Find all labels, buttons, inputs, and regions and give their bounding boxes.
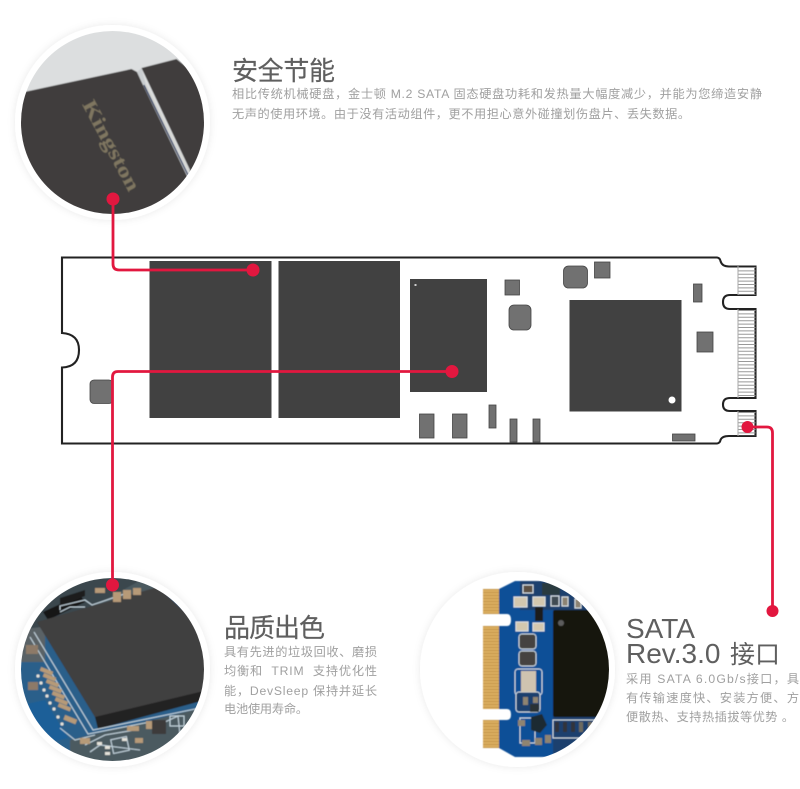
heading: SATA interface <box>626 613 780 669</box>
heading: energy saving: 安全节能 <box>232 56 335 86</box>
traces <box>30 592 200 754</box>
red callout line: SATA interface <box>742 421 778 617</box>
flash memory chip 2 <box>278 261 400 418</box>
red callout line: quality <box>106 365 458 592</box>
text block: energy saving description: 相比传统机械硬盘，金士顿 M.2 SATA 固态硬盘功耗和发热量大幅度减少，并能为您缔造安静 <box>232 86 762 101</box>
connector contacts <box>738 267 756 436</box>
text block: SATA interface description: 有传输速度快、安装方便、方 <box>626 690 799 705</box>
board outline <box>62 258 756 444</box>
text block: SATA interface description <box>626 671 799 724</box>
controller chip photo <box>552 609 609 718</box>
text block: SATA interface description: 便散热、支持热插拔等优势 。 <box>626 709 794 724</box>
flash memory chip 1 <box>150 261 272 418</box>
DRAM chip <box>410 279 487 392</box>
Kingston logo text: Kingston <box>78 96 144 195</box>
tan components <box>26 588 156 744</box>
chip top <box>37 587 215 717</box>
heading: SATA interface: Rev.3.0 <box>626 638 720 669</box>
text block: quality description: 均衡和 TRIM 支持优化性 <box>224 663 377 678</box>
text block: quality description: 具有先进的垃圾回收、磨损 <box>224 644 377 659</box>
white pads <box>36 674 127 755</box>
top components <box>520 580 588 611</box>
text block: quality description: 电池使用寿命。 <box>224 701 308 716</box>
text block: energy saving description <box>232 86 762 121</box>
text block: energy saving description: 无声的使用环境。由于没有活动组件，更不用担心意外碰撞划伤盘片、丢失数据。 <box>232 106 690 121</box>
circular photo: SATA connector close-up <box>420 572 623 767</box>
PCB <box>499 581 560 757</box>
text block: quality description: 能，DevSleep 保持并延长 <box>224 683 377 698</box>
middle components <box>515 634 542 743</box>
text block: quality description <box>224 644 377 716</box>
SSD board diagram <box>62 258 756 444</box>
circular photo: Kingston chip close-up <box>15 25 215 230</box>
chip side <box>94 690 202 729</box>
circular photo: PCB and chip close-up <box>15 572 215 767</box>
bottom components <box>552 716 596 754</box>
small components <box>90 262 713 442</box>
blue board area <box>28 700 68 741</box>
heading: quality: 品质出色 <box>224 613 325 643</box>
gold fingers <box>483 589 499 748</box>
heading: SATA interface: SATA <box>626 613 695 644</box>
red callout line: chip surface <box>106 192 260 276</box>
text block: SATA interface description: 采用 SATA 6.0Gb/s接口，具 <box>626 671 799 686</box>
controller chip <box>570 300 682 412</box>
heading: SATA interface: 接口 <box>730 641 780 669</box>
